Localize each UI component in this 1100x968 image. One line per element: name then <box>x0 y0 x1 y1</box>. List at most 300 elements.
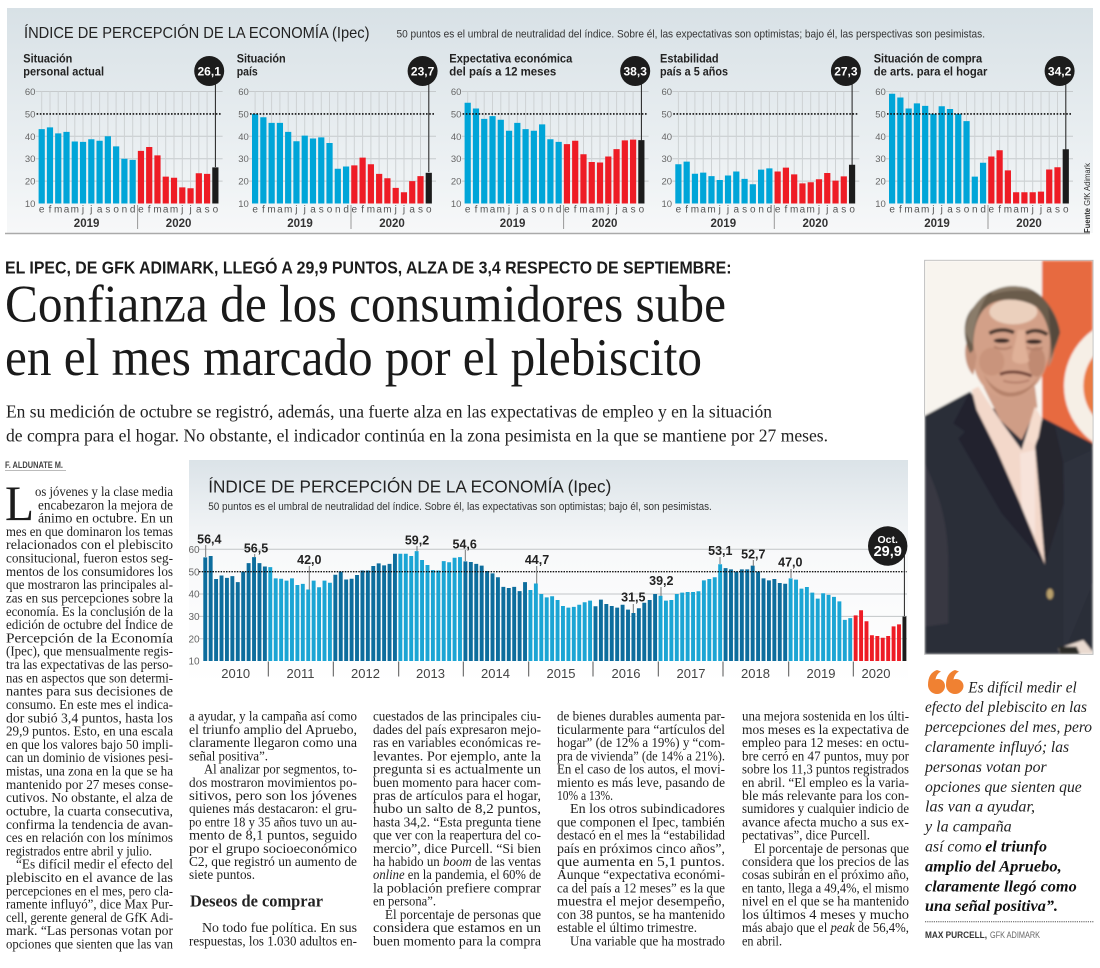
text column 1: zas en sus percepciones sobre la <box>6 592 174 606</box>
chart: expectativa económica: 40 <box>451 132 461 143</box>
text column 4: ticularmente para “artículos del <box>557 723 725 738</box>
panel: main chart: 20 <box>188 634 200 645</box>
chart: expectativa económica: j <box>515 204 518 216</box>
text column 1 <box>6 485 174 952</box>
chart: situación personal actual: j <box>188 204 192 216</box>
chart: situación de compra: j <box>940 204 943 216</box>
text column 3: pregunta si es actualmente un <box>373 762 541 778</box>
text column 4: de bienes durables aumenta par- <box>557 710 725 725</box>
text column 2: mento de 8,1 puntos, seguido <box>189 829 357 844</box>
chart: situación personal actual: a <box>64 204 70 216</box>
text column 5: los últimos 4 meses y mucho <box>742 908 909 923</box>
icon: orange quotation marks <box>928 670 964 694</box>
chart: situación de compra: a <box>1013 204 1019 216</box>
neck <box>983 387 1037 440</box>
chart: situación personal actual: e <box>138 204 144 216</box>
text column 4: que aumenta en 5,1 puntos. <box>557 855 725 870</box>
chart: situación de compra: Situación de compra <box>874 51 982 65</box>
chart: expectativa económica: j <box>614 204 618 216</box>
chart: situación de compra: f <box>899 204 902 216</box>
chart: situación país: j <box>294 204 298 216</box>
text column 3: que ver con la reapertura del co- <box>373 829 541 844</box>
chart: estabilidad país a 5 años: 30 <box>662 154 672 165</box>
chart: situación personal actual: o <box>213 204 219 216</box>
chart: expectativa económica: s <box>531 204 536 216</box>
text column 2: el triunfo amplio del Apruebo, <box>189 723 357 738</box>
chart: expectativa económica: d <box>556 204 561 216</box>
shirt <box>972 387 1045 565</box>
data labels: 47,0 <box>778 556 803 570</box>
headline: en el mes marcado por el plebiscito <box>5 329 702 387</box>
text column 3: dades del país expresaron mejo- <box>373 723 541 738</box>
chart: situación personal actual: 26,1 <box>198 64 221 78</box>
deck: de compra para el hogar. No obstante, el indicador continúa en la zona pesimista en la que se mantiene por 27 meses. <box>6 426 828 446</box>
chart: expectativa económica: m <box>497 204 505 216</box>
chart: situación de compra: j <box>1031 204 1034 216</box>
text column 4: estable el último trimestre. <box>557 921 697 936</box>
chart: situación personal actual: 10 <box>25 199 35 210</box>
chart: situación de compra: a <box>1046 204 1052 216</box>
text column 1: nas en aspectos que son determi- <box>6 671 173 686</box>
text column 2 <box>189 710 358 949</box>
text column 3: buen momento para hacer com- <box>373 776 541 791</box>
chart: situación de compra: 2019 <box>924 218 950 230</box>
text column 1: mistas, una zona en la que se ha <box>6 764 174 780</box>
callout: october value <box>868 526 907 616</box>
chart: situación país: a <box>409 204 415 216</box>
text column 5: avance afecta mucho a sus ex- <box>742 815 909 830</box>
chart: situación país: 2019 <box>287 218 313 230</box>
text column 2: respuestas, los 1.030 adultos en- <box>189 934 357 949</box>
text column 1: mark. “Las personas votan por <box>6 924 173 939</box>
chart: situación país: n <box>335 204 341 216</box>
text column 1: confirma la tendencia de avan- <box>6 818 173 833</box>
chart: situación personal actual: m <box>54 204 62 216</box>
data labels: 31,5 <box>621 591 646 605</box>
panel: main chart: 10 <box>188 657 200 668</box>
chart: estabilidad país a 5 años: a <box>833 204 839 216</box>
chart: situación de compra: j <box>1039 204 1042 216</box>
chart: estabilidad país a 5 años: 60 <box>662 87 672 98</box>
chart: situación de compra: 40 <box>875 132 886 143</box>
pull quote <box>923 679 1092 915</box>
quote attribution <box>925 930 1040 941</box>
chart: situación de compra: s <box>1055 204 1060 216</box>
chart: situación de compra: 10 <box>875 199 886 210</box>
chart: estabilidad país a 5 años: m <box>707 204 716 216</box>
jacket <box>925 392 1093 654</box>
chart: situación de compra: d <box>980 204 986 216</box>
chart: situación personal actual: j <box>89 204 92 216</box>
chart: estabilidad país a 5 años: a <box>734 204 740 216</box>
data labels: 56,5 <box>244 542 268 556</box>
chart: estabilidad país a 5 años: 10 <box>662 199 672 210</box>
year axis: 2014 <box>481 666 510 681</box>
text column 1: economía. Es la conclusión de la <box>6 605 174 620</box>
chart: situación de compra: s <box>956 204 961 216</box>
chart: situación personal actual: s <box>205 204 210 216</box>
text column 4: miento es más leve, pasando de <box>557 776 725 791</box>
chart: expectativa económica: j <box>507 204 510 216</box>
heading: main chart title: ÍNDICE DE PERCEPCIÓN DE LA ECONOMÍA (Ipec) <box>208 475 611 496</box>
chart: situación país: j <box>303 204 306 216</box>
deck <box>6 402 828 446</box>
chart: situación país: m <box>367 204 375 216</box>
text column 2: quienes más destacaron: el gru- <box>189 802 357 817</box>
source credit: Fuente GfK Adimark <box>1083 162 1092 233</box>
chart: situación país: f <box>262 204 265 216</box>
chart: situación país: m <box>284 204 292 216</box>
text column 4: ca del país a 12 meses” es la que <box>557 881 725 896</box>
pull quote: personas votan por <box>924 759 1048 776</box>
text column 5: ble más relevante para los con- <box>742 789 909 804</box>
chart: situación de compra: e <box>989 204 995 216</box>
text column 4: pra de vivienda” (de 14% a 21%). <box>557 749 725 764</box>
chart: situación de compra: 30 <box>875 154 886 165</box>
text column 5: en tanto, llega a 49,4%, el mismo <box>742 881 909 896</box>
chart: expectativa económica: 2020 <box>592 218 617 230</box>
chart: situación personal actual: s <box>105 204 110 216</box>
text column 2: por el grupo socioeconómico <box>189 842 357 857</box>
text column 2: po entre 18 y 35 años tuvo un au- <box>189 815 357 830</box>
year axis: 2018 <box>741 666 770 681</box>
pull quote: claramente influyó; las <box>925 739 1069 756</box>
face <box>972 298 1052 388</box>
chart: situación país: a <box>277 204 283 216</box>
chart: situación país: f <box>361 204 364 216</box>
panel: main chart <box>188 460 908 685</box>
lapels <box>955 394 1042 559</box>
chart: situación de compra: m <box>921 204 929 216</box>
pull quote: efecto del plebiscito en las <box>925 699 1087 716</box>
chart: situación país: o <box>426 204 432 216</box>
headline <box>5 276 726 387</box>
text column 2: sitivos, pero son los jóvenes <box>189 789 357 804</box>
chart: situación personal actual: e <box>39 204 45 216</box>
chart: situación país: d <box>343 204 349 216</box>
text column 2: Al analizar por segmentos, to- <box>204 762 357 778</box>
text column 5: sumidores y cualquier indicio de <box>742 802 909 817</box>
data labels: 54,6 <box>453 537 477 551</box>
text column 1: “Es difícil medir el efecto del <box>16 858 173 873</box>
text column 2: dos mostraron movimientos po- <box>189 776 357 791</box>
chart: situación personal actual: d <box>130 204 135 216</box>
chart: situación país <box>237 51 438 230</box>
chart: situación personal actual: o <box>113 204 119 216</box>
chart: estabilidad país a 5 años: n <box>758 204 764 216</box>
text column 3: ha habido un boom de las ventas <box>373 855 541 870</box>
chart: situación personal actual: 2020 <box>166 218 191 230</box>
text column 3: la población prefiere comprar <box>373 881 541 896</box>
chart: situación de compra: j <box>931 204 935 216</box>
chart: estabilidad país a 5 años: a <box>800 204 806 216</box>
byline: F. ALDUNATE M. <box>5 460 63 471</box>
chart: situación país: e <box>252 204 258 216</box>
data labels <box>197 532 803 613</box>
chart: situación de compra: o <box>964 204 970 216</box>
year axis: 2010 <box>221 666 250 681</box>
text column 5: en abril. “El empleo es la varia- <box>742 776 909 791</box>
chart: estabilidad país a 5 años: m <box>807 204 815 216</box>
chart: situación personal actual <box>23 51 224 230</box>
pull quote: el triunfo <box>985 838 1047 856</box>
chart: expectativa económica: 20 <box>451 177 461 188</box>
chart: expectativa económica: m <box>480 204 488 216</box>
text column 4 <box>557 710 725 949</box>
pull quote: y la campaña <box>923 819 1012 836</box>
text column 5: en abril. <box>742 934 782 949</box>
heading: top panel title: ÍNDICE DE PERCEPCIÓN DE LA ECONOMÍA (Ipec) <box>24 23 370 42</box>
text column 5: mos meses es la expectativa de <box>742 723 909 738</box>
chart: situación personal actual: Situación <box>23 51 72 65</box>
chart: situación país: 2020 <box>379 218 405 230</box>
chart: expectativa económica: m <box>596 204 604 216</box>
text column 3: buen momento para la compra <box>373 934 542 949</box>
text column 1: ces en relación con los mínimos <box>6 831 173 846</box>
year axis: 2017 <box>677 666 705 681</box>
text column 1: nantes para sus decisiones de <box>6 685 173 700</box>
text column 1: os jóvenes y la clase media <box>35 485 174 500</box>
text column 4: Aunque “expectativa económi- <box>557 868 725 883</box>
chart: expectativa económica: j <box>606 204 609 216</box>
chart: estabilidad país a 5 años: 40 <box>662 132 672 143</box>
chart: situación personal actual: j <box>81 204 84 216</box>
chart: estabilidad país a 5 años: m <box>691 204 699 216</box>
chart: expectativa económica: f <box>574 204 577 216</box>
chart: estabilidad país a 5 años: país a 5 años <box>660 65 728 79</box>
panel: main chart: 50 <box>188 567 200 578</box>
chart: situación personal actual: 2019 <box>74 218 99 230</box>
data labels: 44,7 <box>525 553 549 567</box>
text column 5: una mejora sostenida en los últi- <box>742 710 909 725</box>
chart: expectativa económica: n <box>548 204 553 216</box>
year axis <box>221 662 890 681</box>
chart: situación personal actual: m <box>153 204 162 216</box>
chart: situación país: 40 <box>238 132 249 143</box>
chart: situación personal actual: 40 <box>25 132 35 143</box>
text column 4: muestra el mejor desempeño, <box>557 895 725 910</box>
chart: expectativa económica: s <box>631 204 636 216</box>
year axis: 2015 <box>547 666 575 681</box>
chart: situación país: a <box>310 204 316 216</box>
text: main chart subtitle: 50 puntos es el umbral de neutralidad del índice. Sobre él, las expectativas son optimistas; bajo él, son pesimistas. <box>208 501 712 513</box>
pull quote: así como <box>925 838 982 856</box>
text column 4: destacó en el mes la “estabilidad <box>557 829 725 844</box>
chart: situación país: 23,7 <box>411 64 435 78</box>
chart: situación de compra: o <box>1063 204 1069 216</box>
chart: situación de compra: 2020 <box>1016 218 1042 230</box>
text column 1: mentos de los consumidores los <box>6 565 173 580</box>
chart: situación personal actual: m <box>170 204 178 216</box>
chart: situación personal actual: 50 <box>25 109 35 120</box>
text column 1: octubre, la cuarta consecutiva, <box>6 804 173 819</box>
text column 5: pectativas”, dice Purcell. <box>742 829 870 844</box>
chart: estabilidad país a 5 años: d <box>767 204 772 216</box>
text column 3: pras de artículos para el hogar, <box>373 789 541 804</box>
text column 1: opciones que sienten que las van <box>6 938 173 952</box>
text column 4: con 38 puntos, se ha mantenido <box>557 908 725 923</box>
chart: expectativa económica: del país a 12 meses <box>449 65 557 79</box>
chart: expectativa económica: a <box>622 204 628 216</box>
chart: expectativa económica: 10 <box>451 199 461 210</box>
chart: situación de compra: 50 <box>875 109 886 120</box>
text column 1: cutivos. No obstante, el alza de <box>6 791 173 806</box>
text column 1: (Ipec), que mensualmente regis- <box>6 645 173 660</box>
chart: situación país: o <box>327 204 333 216</box>
chart: situación personal actual: personal actual <box>23 65 104 79</box>
chart: situación personal actual: f <box>148 204 151 216</box>
chart: situación de compra: e <box>889 204 895 216</box>
pull quote: opciones que sienten que <box>925 779 1082 796</box>
chart: situación de compra: 60 <box>875 87 886 98</box>
brows and eyes <box>989 330 1047 335</box>
chart: estabilidad país a 5 años: s <box>841 204 846 216</box>
chart: expectativa económica: 60 <box>451 87 461 98</box>
chart: situación país: 50 <box>238 109 249 120</box>
chart: estabilidad país a 5 años: j <box>825 204 828 216</box>
text column 1: registrados entre abril y julio. <box>6 844 152 859</box>
year axis: 2016 <box>612 666 640 681</box>
text column 1: can un dominio de visiones pesi- <box>6 751 173 766</box>
photo: Max Purcell portrait <box>925 260 1100 654</box>
chart: estabilidad país a 5 años: j <box>718 204 721 216</box>
pull quote: claramente llegó como <box>925 878 1077 895</box>
chart: expectativa económica: f <box>475 204 478 216</box>
text column 1: percepciones en el mes, pero cla- <box>6 884 173 899</box>
drop cap: L <box>5 475 34 531</box>
text column 3: en persona”. <box>373 895 436 910</box>
year axis: 2019 <box>807 666 835 681</box>
chart: situación país: j <box>394 204 397 216</box>
text column 1: que mostraron las principales al- <box>6 578 173 593</box>
text column 4: 10% a 13%. <box>557 789 613 804</box>
chart: estabilidad país a 5 años: 27,3 <box>834 64 858 78</box>
chart: estabilidad país a 5 años: m <box>790 204 798 216</box>
text column 1: en que los valores bajo 50 impli- <box>6 738 173 753</box>
chart: situación país: 30 <box>238 154 249 165</box>
text column 1: consitucional, fueron estos seg- <box>6 552 173 567</box>
year axis: 2013 <box>416 666 445 681</box>
pull quote: amplio del Apruebo, <box>925 858 1062 875</box>
chart: estabilidad país a 5 años: Estabilidad <box>660 51 719 65</box>
text column 3: ras en variables económicas re- <box>373 736 541 751</box>
chart: expectativa económica: a <box>490 204 496 216</box>
chart: situación país: 60 <box>238 87 249 98</box>
pull quote: percepciones del mes, pero <box>924 719 1092 736</box>
chart: estabilidad país a 5 años: 20 <box>662 177 672 188</box>
panel: top charts <box>5 8 1093 234</box>
text column 1: ánimo en octubre. En un <box>38 512 173 527</box>
chart: situación personal actual: j <box>180 204 183 216</box>
chart: situación de compra: 20 <box>875 177 886 188</box>
chart: situación personal actual: n <box>122 204 127 216</box>
chart: situación país: j <box>402 204 405 216</box>
text column 1: dor subió 3,4 puntos, hasta los <box>6 711 173 726</box>
text column 3: mercio”, dice Purcell. “Si bien <box>373 842 541 857</box>
chart: estabilidad país a 5 años: o <box>750 204 756 216</box>
data labels: 39,2 <box>649 574 674 588</box>
text column 4: que componen el Ipec, también <box>557 815 725 830</box>
text: top panel subtitle: 50 puntos es el umbral de neutralidad del índice. Sobre él, las expectativas son optimistas; bajo él, las perspectivas son pesimistas. <box>396 28 985 40</box>
chart: estabilidad país a 5 años: j <box>817 204 820 216</box>
text column 1: cell, gerente general de GfK Adi- <box>6 911 173 926</box>
text column 1: relacionados con el plebiscito <box>6 538 173 553</box>
chart: expectativa económica: 38,3 <box>624 64 647 78</box>
chart: situación de compra <box>874 51 1075 230</box>
text column 2: siete puntos. <box>189 868 255 883</box>
text column 1: edición de octubre del Índice de <box>6 616 173 633</box>
text column 4: Una variable que ha mostrado <box>570 934 725 949</box>
chart: situación personal actual: a <box>196 204 202 216</box>
year axis: 2020 <box>862 666 890 681</box>
deck: En su medición de octubre se registró, además, una fuerte alza en las expectativas de empleo y en la situación <box>6 402 772 422</box>
chart: situación personal actual: a <box>97 204 103 216</box>
chart: estabilidad país a 5 años: e <box>775 204 781 216</box>
text column 2: claramente llegaron como una <box>189 736 358 751</box>
text column 5: nivel en el que se ha mantenido <box>742 895 909 910</box>
chart: situación de compra: m <box>1004 204 1012 216</box>
panel: main chart: 60 <box>188 545 200 556</box>
data labels: 56,4 <box>197 532 222 546</box>
text column 2: señal positiva”. <box>189 749 268 764</box>
text column 1: 29,9 puntos. Esto, en una escala <box>6 725 174 740</box>
chart: expectativa económica: 50 <box>451 109 461 120</box>
text column 5: sobre los 11,3 puntos registrados <box>742 762 909 778</box>
chart: situación personal actual: 30 <box>25 154 35 165</box>
text column 4: En los otros subindicadores <box>570 802 725 817</box>
chart: estabilidad país a 5 años: o <box>849 204 855 216</box>
text column 3: levantes. Por ejemplo, ante la <box>373 749 542 764</box>
text column 3 <box>373 710 542 949</box>
chart: situación país: 20 <box>238 177 249 188</box>
chart: estabilidad país a 5 años: s <box>742 204 747 216</box>
chart: estabilidad país a 5 años: a <box>700 204 706 216</box>
text column 3: considera que estamos en un <box>373 921 541 936</box>
chart: estabilidad país a 5 años: f <box>785 204 788 216</box>
mouth <box>1000 372 1032 376</box>
chart: situación de compra: n <box>972 204 978 216</box>
chart: situación país: e <box>352 204 358 216</box>
data labels: 52,7 <box>741 548 766 562</box>
chart: situación personal actual: 60 <box>25 87 35 98</box>
text column 3: El porcentaje de personas que <box>385 908 541 923</box>
data labels: 42,0 <box>297 553 322 567</box>
chart: estabilidad país a 5 años: f <box>685 204 688 216</box>
chart: estabilidad país a 5 años: e <box>676 204 682 216</box>
chart: expectativa económica: e <box>564 204 570 216</box>
year axis: 2012 <box>351 666 380 681</box>
chart: expectativa económica: 30 <box>451 154 461 165</box>
text column 5: empleo para 12 meses: en octu- <box>742 736 909 751</box>
chart: situación país: m <box>267 204 276 216</box>
text column 1: tra las expectativas de las perso- <box>6 658 173 673</box>
panel: main chart: 30 <box>188 612 200 623</box>
text column 5: cosas subirán en el próximo año, <box>742 868 909 883</box>
text column 5: El porcentaje de personas que <box>754 842 909 857</box>
text column 5: más abajo que el peak de 56,4%, <box>742 921 909 936</box>
kicker: EL IPEC, DE GFK ADIMARK, LLEGÓ A 29,9 PUNTOS, ALZA DE 3,4 RESPECTO DE SEPTIEMBRE: <box>5 256 732 277</box>
chart: situación país: 10 <box>238 199 249 210</box>
text column 4: país en próximos cinco años”, <box>557 842 725 857</box>
chart: expectativa económica: 2019 <box>500 218 525 230</box>
callout: october value: Oct. <box>877 534 898 546</box>
text column 5: considera que los precios de las <box>742 855 909 870</box>
chart: estabilidad país a 5 años <box>660 51 861 230</box>
chart: situación de compra: a <box>914 204 920 216</box>
chart: situación de compra: f <box>998 204 1001 216</box>
text column 5: bre cerró en 47 puntos, muy por <box>742 749 909 764</box>
chart: expectativa económica: Expectativa económica <box>449 51 573 65</box>
